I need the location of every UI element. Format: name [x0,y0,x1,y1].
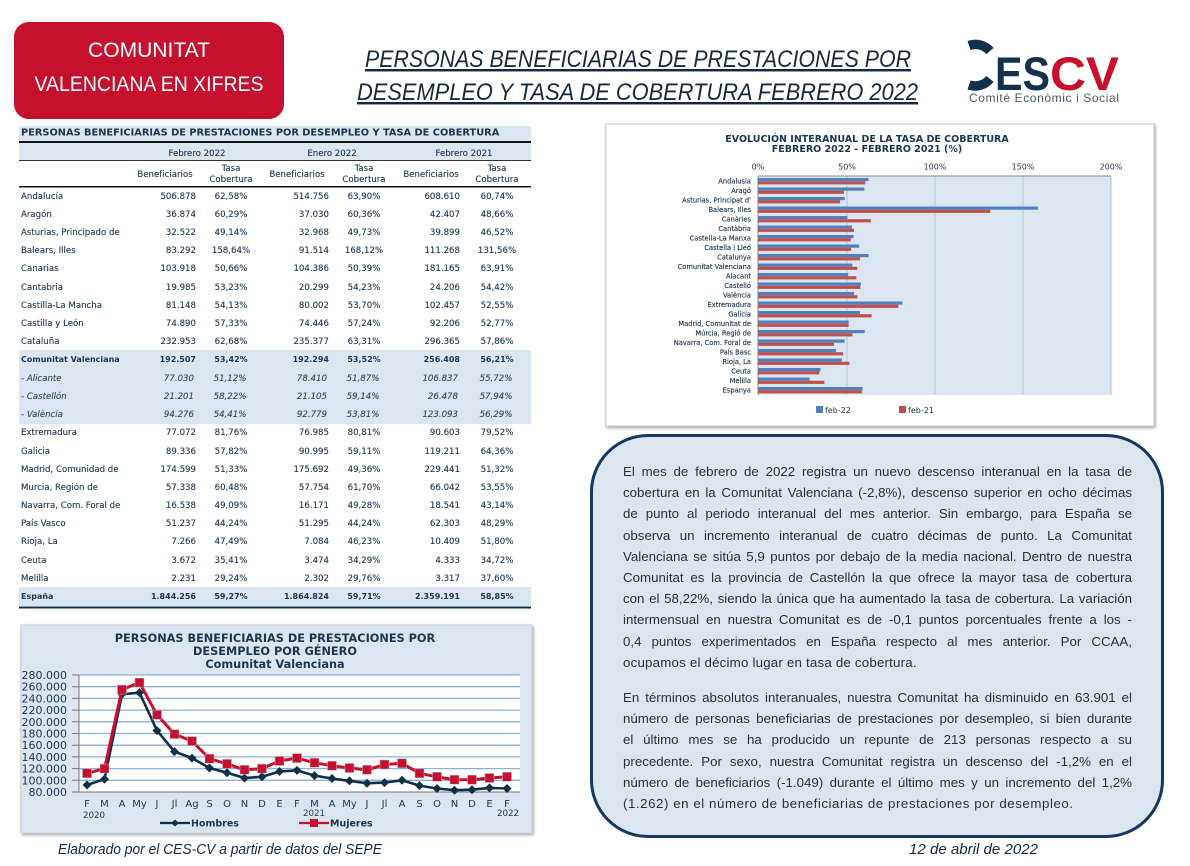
table rows: 53,55% [481,483,513,493]
paragraph 2: número de personas beneficiarias de prestaciones por desempleo, si bien durante [623,711,1132,726]
table rows: - València [21,409,63,420]
table rows: 506.878 [160,192,196,202]
table rows: 20.299 [299,283,329,293]
logo: CES CV [969,44,1120,105]
table column headers: Beneficiarios [137,170,193,180]
main title [357,46,918,106]
table rows: 51.237 [166,519,196,529]
paragraph 1: Valenciana se sitúa 5,9 puntos por debajo de la media nacional. Dentro de nuestra [623,549,1132,564]
table rows: 59,14% [347,392,379,402]
logo: CES CV: CV [1050,47,1120,100]
table rows: 7.084 [304,537,329,547]
table rows: 51,80% [481,537,513,547]
line chart month labels: J [365,799,368,810]
bar chart category labels: Alacant [726,272,751,280]
table rows: 34,29% [348,556,380,566]
line chart month labels: Ag [185,799,199,810]
table rows: 29,24% [215,574,247,584]
table rows: Ceuta [21,556,46,566]
paragraph 1: de punto al periodo interanual del mes anterior. Sin embargo, para España se [623,506,1132,521]
source note: Elaborado por el CES-CV a partir de datos del SEPE [58,842,382,858]
table rows: 54,23% [348,283,380,293]
paragraph 1: intermensual en nuestra Comunitat es de -0,1 puntos porcentuales frente a los - [623,612,1132,627]
line chart month labels: Jl [381,799,387,810]
table rows: 53,81% [347,410,379,420]
table rows: Castilla y León [21,318,84,329]
table rows: - Castellón [21,391,67,402]
table rows: 63,90% [348,192,380,202]
table rows: 51,12% [214,374,246,384]
table rows: 59,27% [214,592,248,601]
line chart month labels: S [206,799,213,810]
table rows: 56,21% [480,355,514,364]
bar chart category labels: Madrid, Comunitat de [678,320,751,328]
table rows: Murcia, Región de [21,482,98,493]
line chart month labels: F [84,799,90,810]
table rows: Navarra, Com. Foral de [21,501,120,511]
table rows: 60,29% [215,210,247,220]
paragraph 1: El mes de febrero de 2022 registra un nuevo descenso interanual en la tasa de [623,464,1132,479]
table rows: 106.837 [422,374,459,384]
line chart month labels: M [100,799,109,810]
table rows: 37.030 [299,210,329,220]
bar chart category labels: Castella i Lleó [704,244,751,252]
table rows: Comunitat Valenciana [21,355,120,364]
table rows: 26.478 [428,392,459,402]
table rows: 2.231 [171,574,196,584]
table column headers: Febrero 2021 [435,149,493,159]
table rows: 90.603 [430,428,460,438]
table rows: 89.336 [166,447,196,457]
bar chart category labels: Rioja, La [722,358,751,366]
table rows: 34,72% [481,556,513,566]
line chart month labels: Jl [171,799,177,810]
bar chart category labels: Navarra, Com. Foral de [674,339,751,347]
table rows: 43,14% [481,501,513,511]
bar chart legend: feb-22 [825,406,851,415]
table rows: 52,55% [481,301,513,311]
line chart month labels: A [119,799,126,810]
paragraph 2: (1.262) en el número de beneficiarias de prestaciones por desempleo. [623,796,1074,811]
table rows: 4.333 [435,556,460,566]
bar chart category labels: Melilla [730,377,751,385]
table rows: 56,29% [480,410,512,420]
table rows: 32.968 [299,228,329,238]
table rows: Cantabria [21,283,63,293]
table rows: 53,70% [348,301,380,311]
line chart title: Comunitat Valenciana [205,658,345,671]
paragraph 2 [623,690,1132,811]
table rows: 58,85% [480,592,514,601]
table rows: 57.754 [299,483,329,493]
table rows: 64,36% [481,447,513,457]
table rows: 60,74% [481,192,513,202]
line chart month labels: O [223,799,231,810]
table rows: 3.672 [171,556,196,566]
table rows: 229.441 [424,465,460,475]
line chart y axis labels: 140.000 [22,751,67,764]
table rows: 54,41% [214,410,246,420]
table column headers: Febrero 2022 [168,149,226,159]
line chart month labels: J [155,799,158,810]
bar chart category labels: Espanya [723,386,751,394]
table rows: 2.302 [304,574,329,584]
bar chart category labels: Canàries [722,216,752,224]
line chart y axis labels: 220.000 [22,704,67,717]
data table: beneficiarios y tasa de cobertura [19,126,531,608]
table rows: Cataluña [21,337,59,347]
table rows: 62.303 [430,519,460,529]
table rows: Andalucía [21,192,63,202]
table rows: 51,87% [347,374,379,384]
table rows: 52,77% [481,319,513,329]
table rows: 514.756 [293,192,329,202]
table rows: 59,11% [348,447,380,457]
table rows: 21.201 [164,392,194,402]
table rows: 192.507 [160,355,196,364]
line chart month labels: F [294,799,300,810]
table rows: 1.844.256 [151,592,196,601]
table rows: 62,68% [215,337,247,347]
line chart month labels [83,799,519,821]
line chart legend: Hombres [191,818,239,830]
paragraph 1: observa un incremento interanual de cuatro décimas de punto. La Comunitat [623,528,1132,543]
line chart month labels: E [276,799,283,810]
table rows: 24.206 [430,283,460,293]
bar chart x axis: 50% [838,162,856,172]
table rows: 53,23% [215,283,247,293]
table rows: Galicia [21,447,50,457]
table rows: 74.890 [166,319,196,329]
paragraph 1: Comunitat es la provincia de Castellón la que ofrece la mayor tasa de cobertura [623,570,1132,585]
line chart month labels: 2022 [497,809,519,819]
line chart month labels: S [416,799,423,810]
line chart title: PERSONAS BENEFICIARIAS DE PRESTACIONES POR [115,632,436,645]
table rows: 55,72% [480,374,512,384]
table rows: 10.409 [430,537,460,547]
line chart title: DESEMPLEO POR GÉNERO [193,645,357,658]
table rows: 49,14% [215,228,247,238]
table rows: 111.268 [424,246,460,256]
table rows: 21.105 [297,392,327,402]
table rows: 74.446 [299,319,329,329]
table rows: Balears, Illes [21,246,76,256]
table rows: 57,82% [215,447,247,457]
table rows: 123.093 [422,410,458,420]
table rows: 1.864.824 [284,592,329,601]
paragraph 1: ocupamos el décimo lugar en tasa de cobertura. [623,655,917,670]
bar chart category labels: Castella-La Manxa [690,234,751,242]
table rows: Rioja, La [21,537,58,547]
table rows: 62,58% [215,192,247,202]
table rows: 80.002 [299,301,329,311]
table rows: 102.457 [424,301,460,311]
table rows: 61,70% [348,483,380,493]
table rows: 256.408 [424,355,460,364]
table rows: 3.474 [304,556,329,566]
bar chart category labels: Catalunya [717,254,751,262]
paragraph 1: con el 58,22%, siendo la única que ha aumentado la tasa de cobertura. La variación [623,591,1132,606]
table rows: 81,76% [215,428,247,438]
table rows: Extremadura [21,428,77,438]
paragraph 2: precedente. Por sexo, nuestra Comunitat registra un descenso del -1,2% en el [623,754,1132,769]
table rows: 91.514 [299,246,329,256]
panel: commentary text [590,434,1164,838]
table rows: 53,42% [214,355,248,364]
table rows: 192.294 [293,355,329,364]
table rows: 63,91% [481,264,513,274]
table rows: 49,09% [215,501,247,511]
table rows: 175.692 [293,465,329,475]
line chart y axis labels: 200.000 [22,716,67,729]
header badge: Comunitat Valenciana en Xifres [14,22,284,119]
panel: line chart beneficiarias por género [21,625,532,833]
table rows: 57.338 [166,483,196,493]
table rows: 83.292 [166,246,196,256]
table rows: 90.995 [299,447,329,457]
table rows: 80,81% [348,428,380,438]
line chart month labels: F [504,799,510,810]
table rows: 78.410 [297,374,328,384]
table column headers: Cobertura [342,175,386,185]
table rows: 47,49% [215,537,247,547]
table rows: Melilla [21,574,49,584]
paragraph 1 [623,464,1132,670]
table rows: 3.317 [435,574,460,584]
bar chart category labels: Aragó [731,187,751,195]
bar chart x axis: 100% [924,162,947,172]
table rows: 235.377 [293,337,329,347]
line chart month labels: N [241,799,248,810]
table rows: 66.042 [430,483,460,493]
table rows: 46,23% [348,537,380,547]
table rows: 232.953 [160,337,196,347]
table rows: 181.165 [424,264,460,274]
bar chart title: FEBRERO 2022 - FEBRERO 2021 (%) [772,144,962,155]
bar chart category labels: Extremadura [708,301,751,309]
table rows: 94.276 [164,410,195,420]
table rows: 60,36% [348,210,380,220]
bar chart category labels: Andalusia [718,178,751,186]
header badge: Comunitat Valenciana en Xifres: COMUNITAT [88,38,210,62]
table rows: 2.359.191 [415,592,460,601]
table rows: 51.295 [299,519,329,529]
table rows: 59,71% [347,592,381,601]
panel: bar chart evolución tasa de cobertura [606,124,1154,426]
line chart month labels: D [258,799,266,810]
bar chart title [725,133,1009,155]
line chart month labels: E [486,799,493,810]
table rows: 7.266 [171,537,196,547]
table rows: 81.148 [166,301,196,311]
line chart y axis labels: 260.000 [22,681,67,694]
table rows: - Alicante [21,374,62,384]
bar chart legend: feb-21 [908,406,934,415]
table rows: 57,33% [215,319,247,329]
bar chart x axis: 0% [752,162,765,172]
line chart legend: Mujeres [330,818,373,830]
table column headers [137,149,519,185]
table rows: 168,12% [345,246,383,256]
table rows: País Vasco [21,519,66,529]
table rows: 37,60% [481,574,513,584]
table column headers: Beneficiarios [269,170,325,180]
line: Mujeres [87,683,507,780]
line chart y axis labels: 80.000 [28,786,67,799]
line: Hombres [87,693,507,790]
table rows: 49,73% [348,228,380,238]
line chart y axis labels: 160.000 [22,739,67,752]
line chart y axis labels: 100.000 [22,774,67,787]
table rows: 50,39% [348,264,380,274]
paragraph 2: En términos absolutos interanuales, nuestra Comunitat ha disminuido en 63.901 el [623,690,1132,705]
line chart y axis labels: 280.000 [22,669,67,682]
bar chart category labels [674,178,752,394]
paragraph 1: 0,4 puntos experimentados en España respecto al mes anterior. Por CCAA, [623,634,1132,648]
main title: PERSONAS BENEFICIARIAS DE PRESTACIONES POR [365,46,911,73]
table rows: Aragón [21,209,52,220]
bar chart category labels: Balears, Illes [708,206,752,214]
table rows: 48,66% [481,210,513,220]
table rows: 77.072 [166,428,196,438]
line chart month labels: 2020 [83,811,105,821]
table rows: 57,94% [480,392,512,402]
table rows: 51,32% [481,465,513,475]
table rows: 54,13% [215,301,247,311]
table rows: 16.171 [299,501,329,511]
table column headers: Tasa [221,164,240,174]
bar chart title: EVOLUCIÓN INTERANUAL DE LA TASA DE COBERTURA [725,133,1009,145]
main title: DESEMPLEO Y TASA DE COBERTURA FEBRERO 2022 [357,79,918,106]
table rows: 51,33% [215,465,247,475]
table rows: 63,31% [348,337,380,347]
bar chart category labels: València [723,292,751,300]
date note: 12 de abril de 2022 [909,842,1038,858]
table rows: Castilla-La Mancha [21,301,102,311]
table rows: 92.779 [297,410,327,420]
table rows: 42.407 [430,210,460,220]
line chart month labels: My [132,799,147,810]
bar chart legend [816,406,934,415]
table rows: 53,52% [347,355,381,364]
table rows: 18.541 [430,501,460,511]
logo: CES CV: Comité Econòmic i Social [969,91,1119,105]
table rows: 46,52% [481,228,513,238]
table rows: España [21,592,53,601]
table rows: 296.365 [424,337,460,347]
table column headers: Tasa [354,164,373,174]
bar chart category labels: País Basc [720,348,751,356]
bar chart x axis: 150% [1012,162,1035,172]
table rows: 79,52% [481,428,513,438]
table column headers: Cobertura [209,175,253,185]
table column headers: Enero 2022 [307,149,357,159]
line chart legend [160,818,373,830]
line chart y axis labels: 240.000 [22,692,67,705]
table rows: 44,24% [215,519,247,529]
table rows: 58,22% [214,392,246,402]
table title: PERSONAS BENEFICIARIAS DE PRESTACIONES POR DESEMPLEO Y TASA DE COBERTURA [21,128,500,138]
bar chart category labels: Galicia [728,310,751,318]
paragraph 2: número de beneficiarios (-1.049) durante el último mes y un incremento del 1,2% [623,775,1132,790]
table rows: 19.985 [166,283,196,293]
header badge: Comunitat Valenciana en Xifres: VALENCIANA EN XIFRES [34,72,264,96]
table rows [21,192,516,601]
line chart y axis labels: 120.000 [22,763,67,776]
table rows: 608.610 [424,192,460,202]
table rows: Madrid, Comunidad de [21,465,119,475]
table rows: 44,24% [348,519,380,529]
line chart month labels: A [399,799,406,810]
table rows: 49,28% [348,501,380,511]
table rows: 29,76% [348,574,380,584]
bar chart x axis [752,162,1123,172]
line chart month labels: O [433,799,441,810]
table rows: 76.985 [299,428,329,438]
line chart month labels: D [468,799,476,810]
line chart month labels: N [451,799,458,810]
paragraph 2: el último mes se ha producido un repunte de 213 personas respecto a su [623,732,1132,747]
bar chart category labels: Asturias, Principat d' [682,196,751,204]
table rows: 35,41% [215,556,247,566]
table rows: 92.206 [430,319,460,329]
table rows: 131,56% [478,246,516,256]
line chart month labels: A [329,799,336,810]
table rows: 16.538 [166,501,196,511]
table rows: 54,42% [481,283,513,293]
table rows: 119.211 [424,447,460,457]
bar chart category labels: Castelló [724,282,751,290]
table rows: 49,36% [348,465,380,475]
table column headers: Tasa [487,164,506,174]
table column headers: Cobertura [475,175,519,185]
table rows: 60,48% [215,483,247,493]
table rows: 50,66% [215,264,247,274]
bars feb-22 and feb-21 [758,178,1038,393]
line chart month labels: M [310,799,319,810]
table rows: 48,29% [481,519,513,529]
line chart month labels: 2021 [303,809,325,819]
logo: CES CV: ES [995,47,1050,100]
table rows: 36.874 [166,210,196,220]
table rows: 158,64% [212,246,250,256]
line chart y axis labels: 180.000 [22,728,67,740]
bar chart category labels: Ceuta [731,368,751,376]
table rows: 77.030 [164,374,195,384]
table column headers: Beneficiarios [403,170,459,180]
line chart title [115,632,436,671]
table rows: 104.386 [293,264,329,274]
bar chart category labels: Cantàbria [718,225,751,233]
line chart month labels: My [342,799,357,810]
table rows: Asturias, Principado de [21,228,120,238]
table rows: 32.522 [166,228,196,238]
table rows: 39.899 [430,228,460,238]
paragraph 1: cobertura en la Comunitat Valenciana (-2,8%), descenso superior en ocho décimas [623,485,1132,500]
bar chart category labels: Comunitat Valenciana [678,263,751,271]
table rows: 57,86% [481,337,513,347]
table rows: 57,24% [348,319,380,329]
bar chart category labels: Múrcia, Regió de [695,330,751,338]
line chart y axis labels [22,669,67,799]
table rows: 174.599 [160,465,196,475]
table rows: 103.918 [160,264,196,274]
bar chart x axis: 200% [1100,162,1123,172]
table rows: Canarias [21,264,59,274]
